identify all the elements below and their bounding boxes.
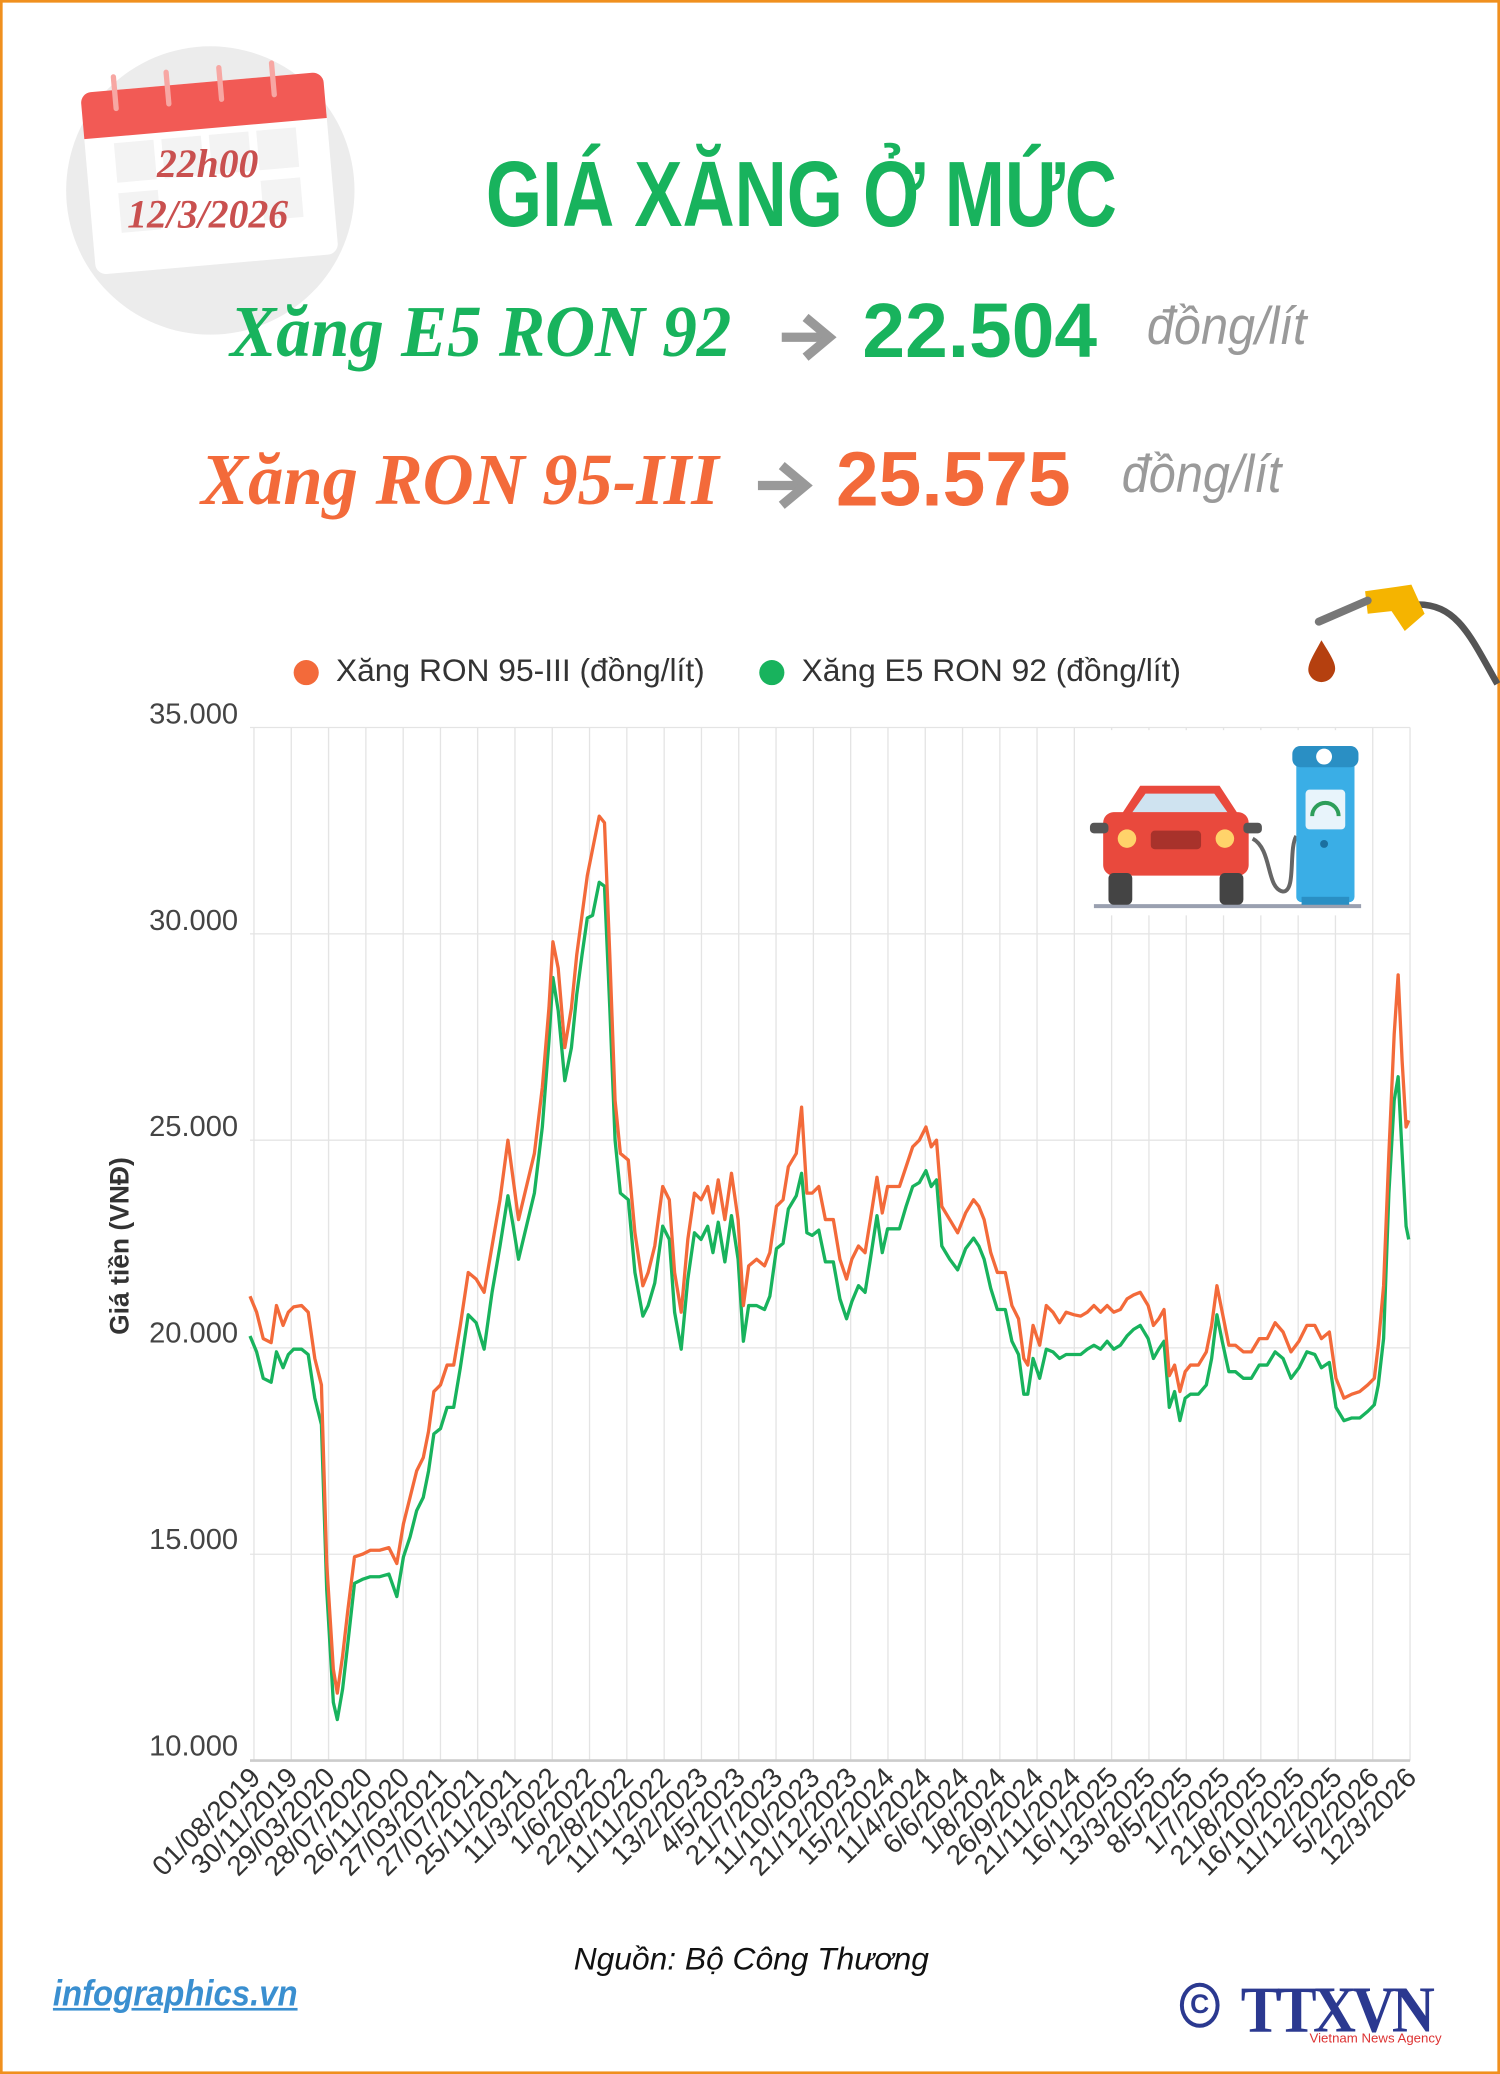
line chart: 4/5/2023 — [653, 1761, 751, 1860]
icon: calendar — [66, 46, 354, 334]
price row: E5 RON 92: Xăng E5 RON 92 — [230, 291, 731, 372]
source note: Nguồn: Bộ Công Thương — [574, 1942, 929, 1978]
line chart: 16/10/2025 — [1190, 1761, 1310, 1882]
legend — [294, 653, 1181, 689]
line chart: 1/7/2025 — [1137, 1761, 1236, 1860]
line chart: 30/11/2019 — [185, 1761, 303, 1880]
series: RON 95-III — [250, 816, 1409, 1693]
logo: TTXVN: Vietnam News Agency — [1310, 2032, 1442, 2046]
line chart: 35.000 — [149, 699, 238, 731]
line chart: 25/11/2021 — [408, 1761, 527, 1880]
line chart: 26/9/2024 — [940, 1761, 1049, 1871]
line chart — [104, 699, 1422, 1882]
price row: RON 95-III — [199, 437, 1283, 522]
legend: Xăng RON 95-III (đồng/lít) — [336, 653, 705, 689]
line chart: 21/12/2023 — [743, 1761, 863, 1882]
line chart: 26/11/2020 — [297, 1761, 415, 1880]
price row: E5 RON 92 — [228, 288, 1308, 374]
line chart: 16/1/2025 — [1015, 1761, 1124, 1871]
line chart: 22/8/2022 — [530, 1761, 639, 1871]
icon: fuel nozzle — [1308, 584, 1500, 686]
line chart: 11/11/2022 — [559, 1761, 676, 1879]
icon: car at fuel pump — [1081, 730, 1372, 915]
line chart: 15/2/2024 — [791, 1761, 900, 1871]
series: E5 RON 92 — [250, 882, 1409, 1720]
line chart: 13/2/2023 — [604, 1761, 714, 1871]
line chart: 21/8/2025 — [1164, 1761, 1273, 1871]
line chart: 13/3/2025 — [1052, 1761, 1161, 1871]
line chart: 6/6/2024 — [876, 1761, 975, 1860]
line chart: 1/6/2022 — [503, 1761, 602, 1860]
line chart: Giá tiền (VNĐ) — [104, 1157, 134, 1335]
line chart: 20.000 — [149, 1318, 238, 1350]
line chart: 8/5/2025 — [1100, 1761, 1198, 1860]
line chart: 28/07/2020 — [258, 1761, 378, 1882]
line chart: 29/03/2020 — [221, 1761, 341, 1882]
line chart: 30.000 — [149, 905, 238, 937]
price row: RON 95-III: đồng/lít — [1122, 446, 1281, 504]
line chart: 11/10/2023 — [707, 1761, 826, 1880]
line chart: 27/07/2021 — [370, 1761, 490, 1882]
date text: 12/3/2026 — [127, 193, 288, 237]
line chart: 21/7/2023 — [679, 1761, 788, 1871]
line chart: 01/08/2019 — [146, 1761, 266, 1882]
title: GIÁ XĂNG Ở MỨC — [486, 143, 1117, 246]
brand: infographics.vn: infographics.vn — [53, 1974, 298, 2013]
line chart: 1/8/2024 — [914, 1761, 1012, 1860]
price row: RON 95-III: Xăng RON 95-III — [201, 439, 719, 520]
logo: TTXVN: TTXVN — [1241, 1972, 1431, 2046]
line chart: 15.000 — [149, 1524, 238, 1556]
date text — [127, 143, 288, 237]
line chart: 11/12/2025 — [1229, 1761, 1348, 1880]
price row: RON 95-III: 25.575 — [836, 437, 1071, 522]
line chart: 25.000 — [149, 1111, 238, 1143]
date text: 22h00 — [157, 143, 258, 187]
price row: E5 RON 92: đồng/lít — [1147, 298, 1307, 356]
line chart: 10.000 — [149, 1730, 238, 1762]
line chart: 12/3/2026 — [1313, 1761, 1422, 1871]
legend: Xăng E5 RON 92 (đồng/lít) — [802, 653, 1181, 689]
price row: E5 RON 92: 22.504 — [862, 288, 1097, 374]
logo: TTXVN: C — [1190, 1991, 1209, 2020]
line chart: 5/2/2026 — [1287, 1761, 1385, 1860]
line chart: 27/03/2021 — [332, 1761, 453, 1882]
line chart: 11/4/2024 — [830, 1761, 937, 1869]
line chart: 11/3/2022 — [457, 1761, 564, 1869]
line chart: 21/11/2024 — [968, 1761, 1087, 1880]
